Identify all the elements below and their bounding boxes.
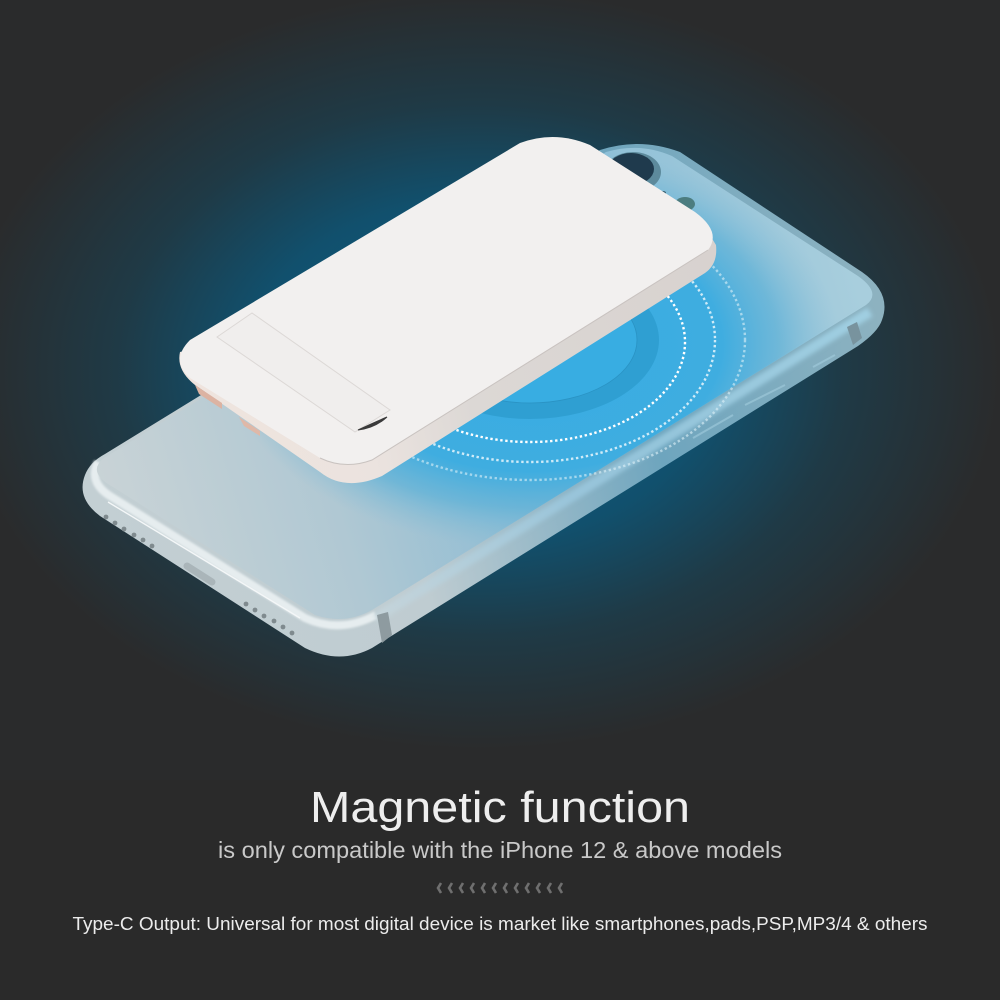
- dark coil ring: [482, 308, 659, 419]
- blue glow: [265, 176, 822, 532]
- stand notch: [358, 417, 387, 430]
- phone: [83, 141, 884, 656]
- charging port: [187, 566, 212, 582]
- subtitle: is only compatible with the iPhone 12 & above models: [218, 837, 782, 863]
- dotted ring 1: [456, 296, 686, 444]
- power bank: [179, 137, 716, 483]
- charging rings: [265, 176, 822, 532]
- bank edge line: [320, 250, 708, 465]
- glass edge highlight: [376, 312, 870, 618]
- stand outline: [217, 313, 390, 432]
- dotted ring 2: [433, 280, 716, 464]
- chevron divider: [438, 883, 562, 893]
- speaker dots right: [244, 602, 294, 635]
- speaker dots left: [104, 515, 154, 548]
- dotted ring 3: [315, 200, 745, 480]
- inner coil disc: [502, 320, 638, 404]
- phone shell: [83, 144, 884, 656]
- footer description: Type-C Output: Universal for most digital device is market like smartphones,pads,PSP,MP3/4 & others: [72, 914, 927, 934]
- USB port 2: [239, 417, 260, 436]
- bank side: [179, 232, 716, 483]
- title: Magnetic function: [310, 783, 690, 832]
- bank top face: [180, 137, 713, 465]
- rim line: [108, 502, 300, 618]
- phone glass rim: [95, 462, 376, 625]
- side buttons: [693, 355, 835, 438]
- flash: [675, 197, 695, 211]
- band bottom: [377, 612, 392, 643]
- phone face: [97, 148, 872, 619]
- microphone: [660, 191, 666, 195]
- camera: [605, 152, 661, 192]
- USB port 1: [195, 385, 222, 409]
- band top right: [847, 322, 862, 345]
